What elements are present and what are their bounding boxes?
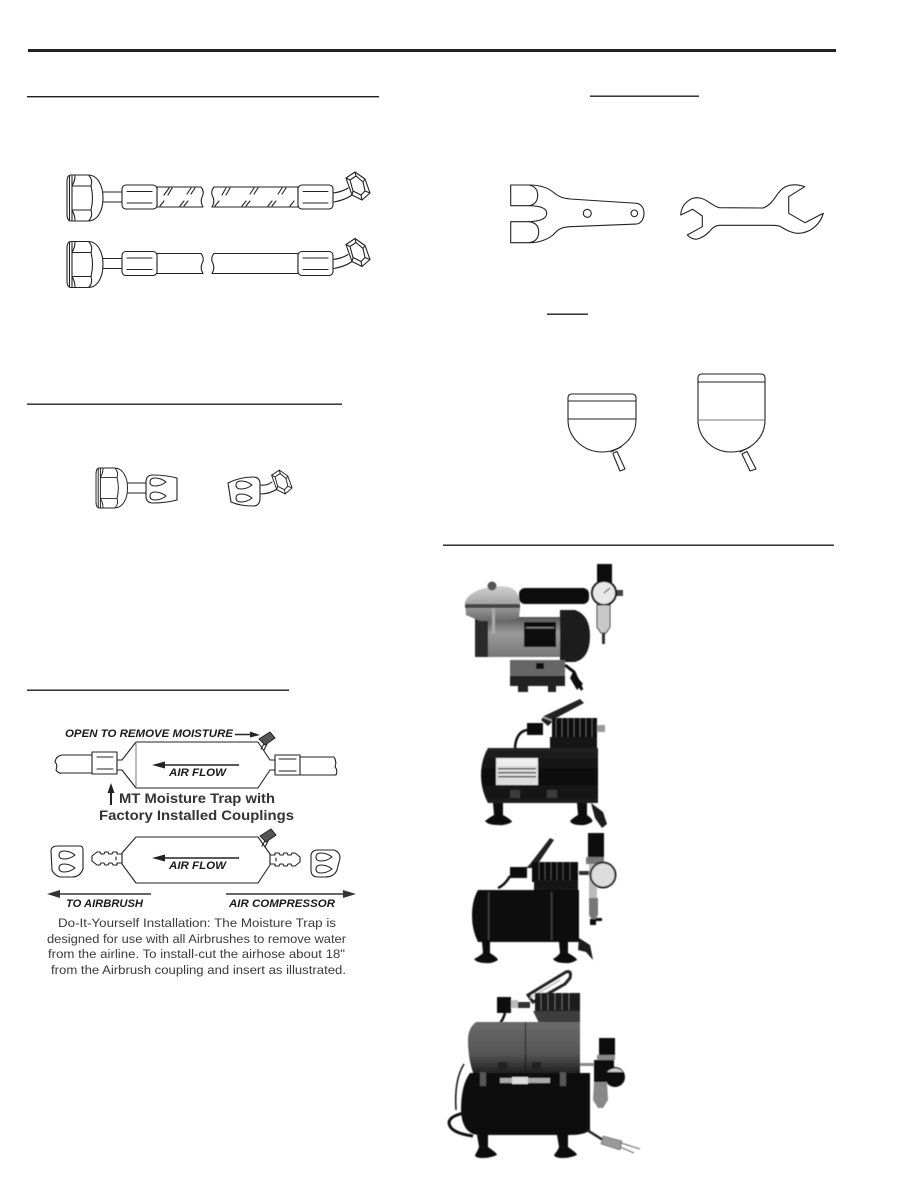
arrow and label: to airbrush: TO AIRBRUSH — [66, 898, 144, 910]
photo: tank compressor with regulator — [449, 972, 640, 1158]
label: factory installed couplings: Factory Installed Couplings — [99, 808, 294, 824]
section rule: moisture trap — [27, 690, 289, 691]
label: factory installed couplings: MT Moisture Trap with — [119, 791, 275, 807]
illustration: braided air hose — [67, 172, 370, 221]
photo: black compressor — [481, 699, 607, 828]
illustration: plain air hose — [67, 238, 370, 288]
icon: large color cup — [698, 374, 765, 471]
arrow and label: to airbrush — [47, 890, 151, 910]
photo: mini compressor with regulator — [465, 564, 623, 692]
panel: moisture trap — [27, 690, 356, 977]
text block: installation note — [47, 916, 346, 977]
photo: black compressor with regulator — [472, 833, 616, 963]
panel: color cups — [547, 314, 765, 471]
text block: installation note: designed for use with all Airbrushes to remove water — [47, 932, 346, 946]
panel: air hoses — [27, 96, 379, 288]
header rule — [28, 49, 836, 52]
arrow and label: air compressor: AIR COMPRESSOR — [228, 898, 336, 910]
section rule: wrenches — [590, 96, 699, 97]
icon: open-end wrench — [681, 185, 823, 239]
text block: installation note: from the airline. To install-cut the airhose about 18" — [48, 947, 345, 961]
section rule: air hoses — [27, 96, 379, 97]
section rule: couplings — [27, 404, 342, 405]
section rule: air compressors — [443, 544, 834, 546]
air flow arrow and label, upper: AIR FLOW — [168, 767, 227, 779]
label: factory installed couplings — [99, 783, 294, 824]
illustration: moisture trap with factory couplings — [55, 732, 337, 788]
icon: small color cup — [568, 394, 636, 471]
callout: open to remove moisture: OPEN TO REMOVE MOISTURE — [65, 728, 233, 740]
illustration: airbrush coupling — [96, 468, 177, 508]
text block: installation note: from the Airbrush coupling and insert as illustrated. — [51, 963, 346, 977]
section rule: color cups — [547, 314, 588, 315]
illustration: do-it-yourself moisture trap — [51, 829, 340, 883]
air flow arrow and label, lower: AIR FLOW — [168, 860, 227, 872]
panel: wrenches — [511, 96, 823, 243]
arrow and label: air compressor — [226, 890, 356, 910]
text block: installation note: Do-It-Yourself Installation: The Moisture Trap is — [58, 916, 336, 930]
panel: couplings — [27, 404, 342, 508]
icon: flat spanner — [511, 185, 644, 243]
air flow arrow and label, lower — [152, 854, 239, 872]
air flow arrow and label, upper — [152, 762, 239, 779]
panel: air compressors — [443, 544, 834, 1158]
illustration: compressor coupling — [228, 470, 292, 506]
